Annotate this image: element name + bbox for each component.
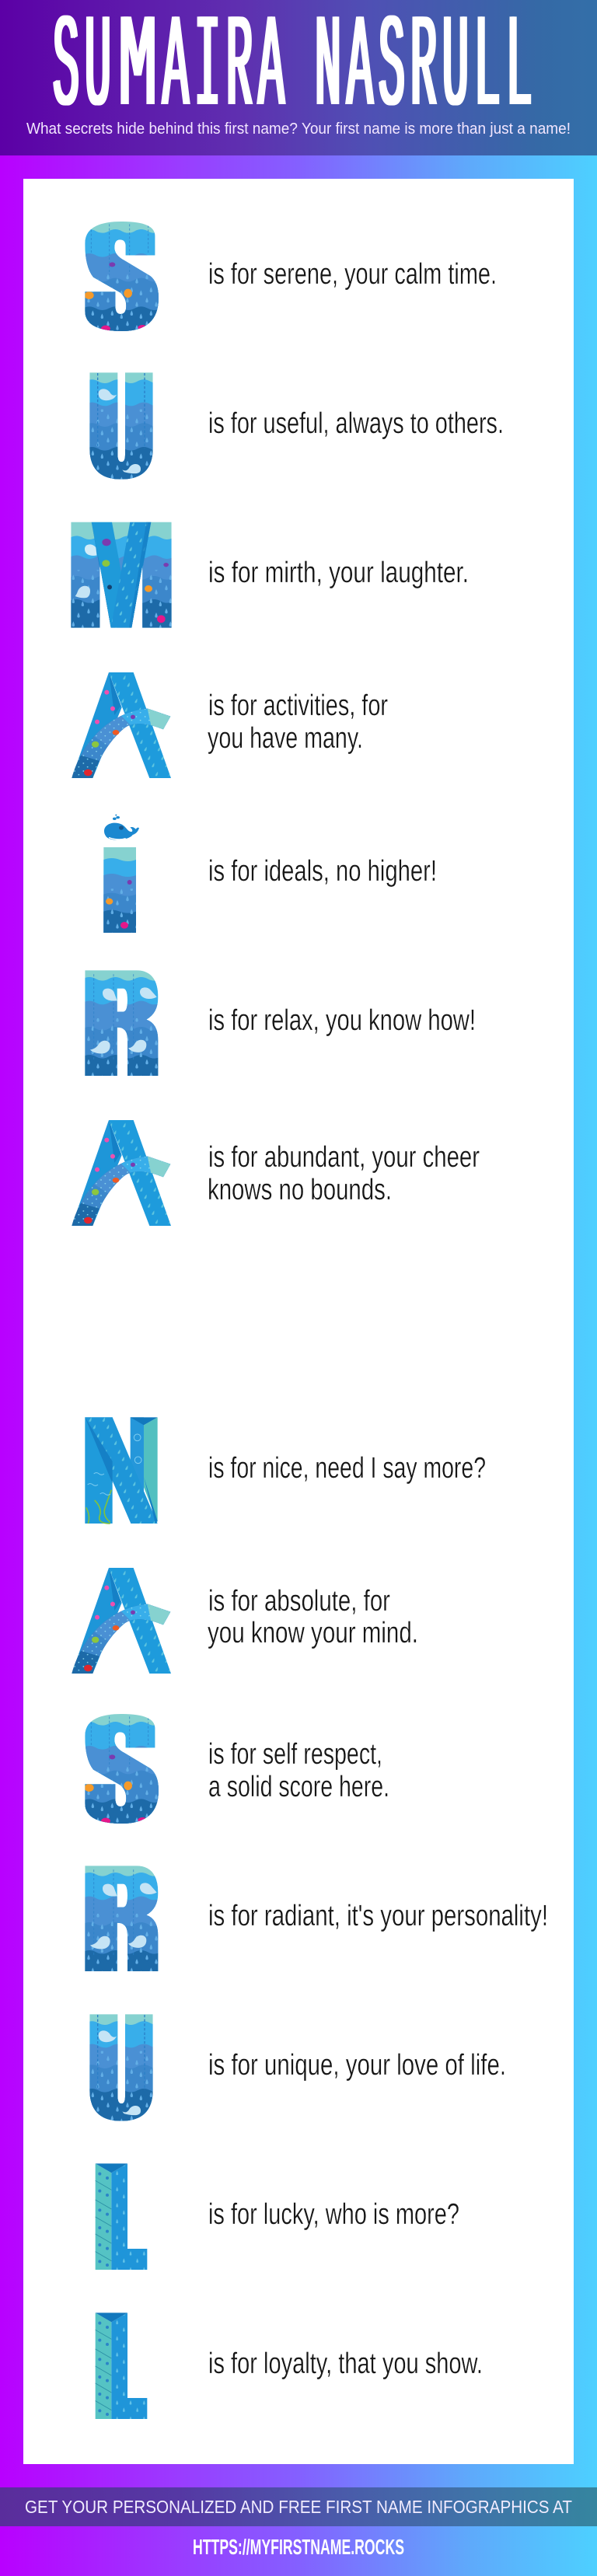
text: A second line: you have many. [208, 722, 363, 755]
icon: letter N [85, 1417, 158, 1524]
icon: letter A [72, 672, 171, 778]
row: A (abundant) [68, 1120, 480, 1227]
icon: letter U [89, 2014, 153, 2121]
footer url: HTTPS://MYFIRSTNAME.ROCKS [193, 2535, 404, 2559]
icon: letter R [83, 1865, 161, 1972]
row: L (loyalty) [96, 2312, 483, 2419]
text: abundant line: is for abundant, your cheer [208, 1141, 480, 1174]
row: N [85, 1417, 486, 1524]
row: U [86, 371, 504, 480]
icon: letter R [83, 969, 161, 1077]
row: U (unique) [86, 2012, 506, 2122]
text: I line: is for ideals, no higher! [208, 855, 437, 888]
text: abundant second line: knows no bounds. [208, 1174, 392, 1206]
text: absolute second line: you know your mind. [208, 1617, 418, 1649]
text: lucky line: is for lucky, who is more? [208, 2198, 459, 2231]
subtitle: What secrets hide behind this first name? Your first name is more than just a name! [26, 120, 571, 138]
row: A [68, 672, 388, 780]
header band [0, 0, 597, 155]
text: absolute line: is for absolute, for [208, 1585, 390, 1618]
text: N line: is for nice, need I say more? [208, 1452, 486, 1485]
row: S [83, 220, 497, 334]
icon: letter L [96, 2163, 147, 2270]
icon: letter S [83, 220, 161, 334]
icon: letter A [72, 1568, 171, 1674]
row: A (absolute) [68, 1568, 418, 1675]
icon: whale [104, 815, 139, 839]
icon: letter U [89, 372, 153, 480]
row: R [83, 969, 476, 1077]
icon: letter A [72, 1120, 171, 1226]
icon: letter M [70, 521, 173, 630]
text: A lines: is for activities, for [208, 689, 388, 722]
title [53, 0, 538, 145]
row: I [103, 815, 437, 933]
text: R line: is for relax, you know how! [208, 1004, 476, 1037]
icon: letter L [96, 2312, 147, 2419]
row: R (radiant) [83, 1865, 548, 1972]
text: self respect second line: a solid score here. [208, 1771, 389, 1803]
row: M [70, 521, 469, 630]
text: loyalty line: is for loyalty, that you show. [208, 2347, 483, 2380]
footer band [0, 2487, 597, 2526]
icon: letter S [83, 1712, 161, 1827]
row: S (self respect) [83, 1712, 389, 1827]
row: L (lucky) [96, 2163, 459, 2270]
text: M line: is for mirth, your laughter. [208, 557, 469, 589]
icon: letter I [103, 847, 136, 933]
text: self respect line: is for self respect, [208, 1738, 382, 1771]
